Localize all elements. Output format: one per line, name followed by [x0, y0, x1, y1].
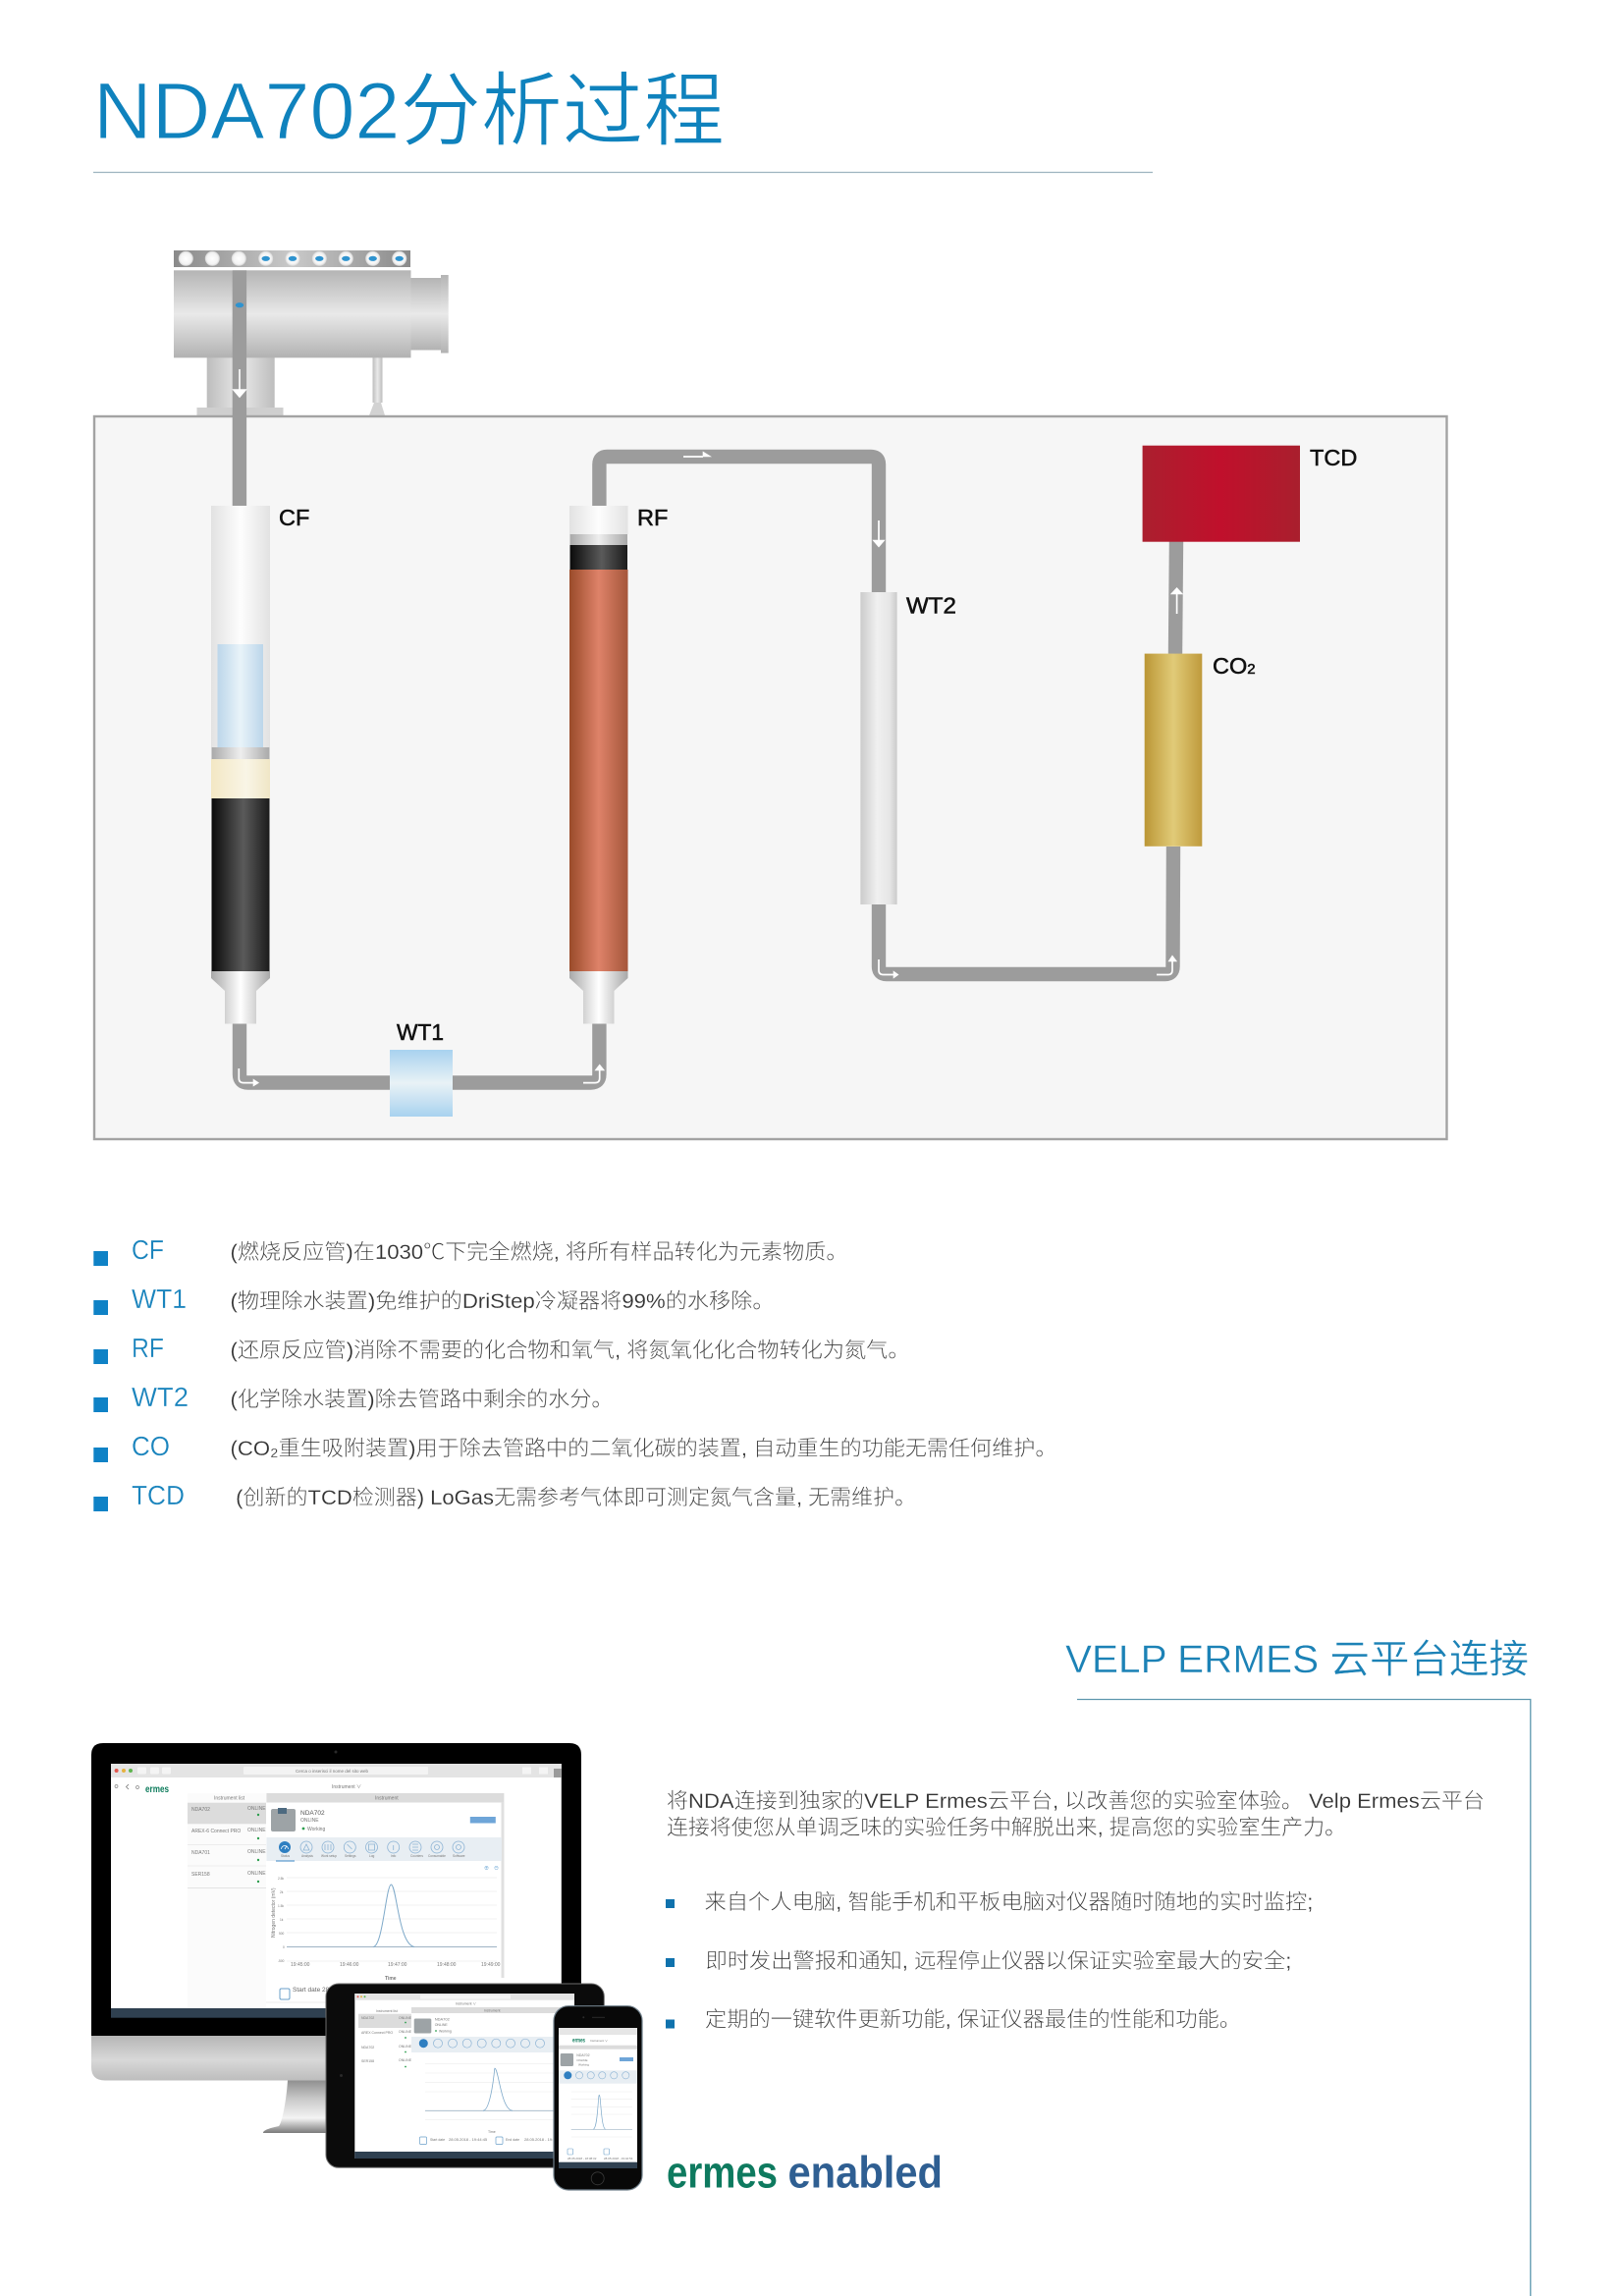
arrow: after WT2 [879, 959, 898, 978]
monitor screen: 500 [279, 1932, 285, 1936]
legend row: WT1 [93, 1284, 775, 1315]
tablet screen: NDA702 [361, 2016, 374, 2020]
legend row: CO: CO [132, 1431, 170, 1461]
pipe: CF through WT1 to RF, WT2 and CO2 [240, 457, 1173, 1082]
label: CO2: CO2 [1213, 653, 1256, 679]
arrow: before RF [583, 1065, 605, 1083]
pipe: CO2 to TCD [1175, 541, 1176, 654]
tablet screen: ONLINE [399, 2016, 412, 2020]
monitor screen: 2k [280, 1890, 284, 1894]
monitor screen [111, 1764, 562, 2018]
CF combustion tube [211, 506, 270, 1023]
monitor screen: AREX-6 Connect PRO [191, 1829, 241, 1834]
legend row: CF: (燃烧反应管)在1030℃下完全燃烧, 将所有样品转化为元素物质。 [230, 1240, 848, 1264]
desktop monitor mockup [91, 1743, 581, 2133]
legend row: WT1: WT1 [132, 1284, 187, 1314]
legend row: CF [93, 1234, 848, 1266]
panel: flow diagram background [94, 416, 1447, 1139]
tablet screen: NDA702 [361, 2046, 374, 2050]
phone screen: ermes [572, 2039, 585, 2045]
legend row: RF [93, 1333, 910, 1364]
furnace flange [410, 275, 449, 354]
flow arrows [239, 452, 1183, 1086]
label: WT2: WT2 [906, 593, 956, 619]
logo: ermes enabled: enabled [787, 2147, 943, 2198]
logo: ermes enabled [667, 2147, 943, 2198]
monitor screen: NDA701 [191, 1850, 210, 1856]
label: CF: CF [279, 505, 309, 530]
monitor screen: ONLINE [247, 1849, 266, 1855]
monitor screen: 19:48:00 [437, 1962, 457, 1968]
CO2 adsorber [1145, 654, 1202, 847]
tablet screen: End date [506, 2138, 519, 2142]
monitor screen: Counters [410, 1854, 423, 1858]
monitor screen: Status [281, 1854, 290, 1858]
monitor screen: ONLINE [247, 1871, 266, 1877]
TCD detector [1143, 446, 1300, 542]
monitor screen: Info [391, 1854, 397, 1858]
WT1 water trap [390, 1050, 453, 1117]
text: intro paragraph: 连接将使您从单调乏味的实验任务中解脱出来, 提高您的实验室生产力。 [667, 1816, 1346, 1839]
tablet screen: Working [439, 2029, 452, 2033]
monitor screen: Time [385, 1976, 397, 1982]
monitor screen: 1.5k [278, 1904, 284, 1908]
bullet 1: 来自个人电脑, 智能手机和平板电脑对仪器随时随地的实时监控; [705, 1890, 1314, 1914]
monitor screen: 28 [322, 1987, 330, 1994]
arrow: before CO2 [1157, 956, 1176, 974]
legend row: WT2: WT2 [132, 1382, 189, 1412]
monitor screen: Consumable [428, 1854, 446, 1858]
tablet screen: SER158 [361, 2059, 374, 2063]
tablet screen: 28.05.2018 - 19:44:45 [449, 2137, 488, 2142]
monitor screen: 2.5k [278, 1877, 284, 1881]
legend row: RF: (还原反应管)消除不需要的化合物和氧气, 将氮氧化化合物转化为氮气。 [230, 1339, 909, 1362]
monitor screen: 19:47:00 [388, 1962, 407, 1968]
monitor screen: NDA702 [300, 1810, 325, 1817]
legend row: WT2: (化学除水装置)除去管路中剩余的水分。 [230, 1388, 613, 1411]
monitor screen: -500 [278, 1959, 285, 1963]
bullet 3: 定期的一键软件更新功能, 保证仪器最佳的性能和功能。 [705, 2007, 1241, 2031]
monitor screen: 1k [280, 1918, 284, 1922]
tablet screen: Time [488, 2130, 496, 2134]
tablet mockup [326, 1984, 604, 2167]
phone screen: Working [578, 2062, 589, 2066]
phone screen: 28.05.2018 - 19:42:54 [604, 2157, 633, 2160]
legend row: RF: RF [132, 1333, 164, 1363]
phone screen [559, 2028, 637, 2168]
tablet screen: Instrument ∨ [456, 2001, 477, 2005]
sample carousel strip [174, 250, 410, 267]
legend row: CO [93, 1431, 1057, 1462]
monitor screen: ONLINE [300, 1818, 319, 1824]
tablet screen: Start date [430, 2138, 445, 2142]
tablet screen: 28.05.2018 - 19: [524, 2137, 553, 2142]
monitor screen: 19:45:00 [291, 1962, 310, 1968]
label: WT1: WT1 [397, 1019, 444, 1045]
label: TCD: TCD [1310, 445, 1357, 470]
legend row: TCD: TCD [132, 1480, 185, 1510]
tablet screen: ONLINE [399, 2045, 412, 2049]
bullet 2: 即时发出警报和通知, 远程停止仪器以保证实验室最大的安全; [705, 1949, 1292, 1973]
monitor screen: Cerca o inserisci il nome del sito web [296, 1769, 369, 1774]
legend row: WT1: (物理除水装置)免维护的DriStep冷凝器将99%的水移除。 [230, 1289, 774, 1313]
pipe: furnace to CF [233, 270, 246, 506]
legend row: CO: (CO₂重生吸附装置)用于除去管路中的二氧化碳的装置, 自动重生的功能无需任何维护。 [230, 1437, 1056, 1460]
monitor screen: Instrument list [214, 1795, 245, 1801]
monitor screen: ⊕ [484, 1866, 489, 1872]
monitor screen: Analysis [301, 1854, 313, 1858]
furnace legs [196, 357, 385, 415]
phone body [554, 2006, 642, 2190]
monitor screen: ⊖ [494, 1866, 499, 1872]
legend row: TCD [93, 1480, 916, 1511]
text: intro paragraph [667, 1789, 1485, 1839]
phone screen: NDA702 [576, 2053, 590, 2057]
monitor screen: NDA702 [191, 1807, 210, 1813]
tablet screen: ONLINE [399, 2058, 412, 2062]
WT2 chemical water trap [860, 592, 897, 904]
monitor screen: Nitrogen detector (mV) [271, 1887, 277, 1938]
heading: VELP ERMES: VELP ERMES 云平台连接 [1065, 1638, 1529, 1681]
monitor screen: ermes [145, 1784, 169, 1795]
tablet screen: ONLINE [435, 2023, 448, 2027]
monitor screen: 0 [283, 1945, 285, 1949]
title: NDA702分析过程 [93, 67, 725, 156]
phone mockup [554, 2006, 642, 2190]
bullet list: ermes benefits [666, 1890, 1314, 2031]
text: intro paragraph: 将NDA连接到独家的VELP Ermes云平台, 以改善您的实验室体验。 Velp Ermes云平台 [667, 1789, 1485, 1813]
RF reduction tube [569, 506, 628, 1023]
tablet screen: Instrument list [376, 2009, 398, 2013]
monitor screen: Settings [345, 1854, 356, 1858]
monitor stand [263, 2080, 327, 2133]
tablet screen: Instrument [484, 2009, 501, 2013]
legend row: WT2 [93, 1382, 614, 1412]
phone screen: ONLINE [576, 2058, 587, 2062]
monitor screen: Software [453, 1854, 465, 1858]
monitor screen: Working [307, 1827, 325, 1832]
monitor screen: Log [369, 1854, 375, 1858]
monitor screen: Work setup [321, 1854, 337, 1858]
monitor screen: Instrument [375, 1795, 399, 1801]
legend row: TCD: (创新的TCD检测器) LoGas无需参考气体即可测定氮气含量, 无需维护。 [236, 1486, 916, 1509]
phone screen: 28.05.2018 - 18:38:32 [568, 2157, 597, 2160]
tablet screen: ONLINE [399, 2030, 412, 2034]
analyser furnace [174, 250, 449, 415]
monitor screen: ONLINE [247, 1806, 266, 1812]
arrow: up to TCD [1170, 587, 1182, 614]
arrow: down to WT2 [873, 520, 885, 547]
furnace body [174, 270, 410, 357]
label: RF: RF [637, 505, 668, 530]
monitor screen: ONLINE [247, 1828, 266, 1833]
monitor screen: 19:49:00 [481, 1962, 501, 1968]
legend list [93, 1234, 1057, 1511]
phone screen: Instrument ∨ [590, 2039, 608, 2043]
arrow: down into CF [234, 369, 245, 397]
arrow: top run [683, 452, 711, 457]
tablet screen [354, 1994, 574, 2159]
monitor screen: SER158 [191, 1872, 210, 1878]
heading: VELP ERMES [1065, 1638, 1531, 2296]
monitor screen: 19:46:00 [340, 1962, 359, 1968]
monitor screen: Start date [293, 1987, 321, 1994]
tablet screen: AREX Connect PRO [361, 2031, 393, 2035]
tablet screen: NDA702 [435, 2017, 451, 2021]
arrow: after CF [239, 1068, 259, 1086]
tablet body [326, 1984, 604, 2167]
legend row: CF: CF [132, 1234, 164, 1265]
monitor body [91, 1743, 581, 2080]
monitor screen: Instrument ∨ [332, 1784, 361, 1790]
logo: ermes enabled: ermes [667, 2147, 778, 2198]
